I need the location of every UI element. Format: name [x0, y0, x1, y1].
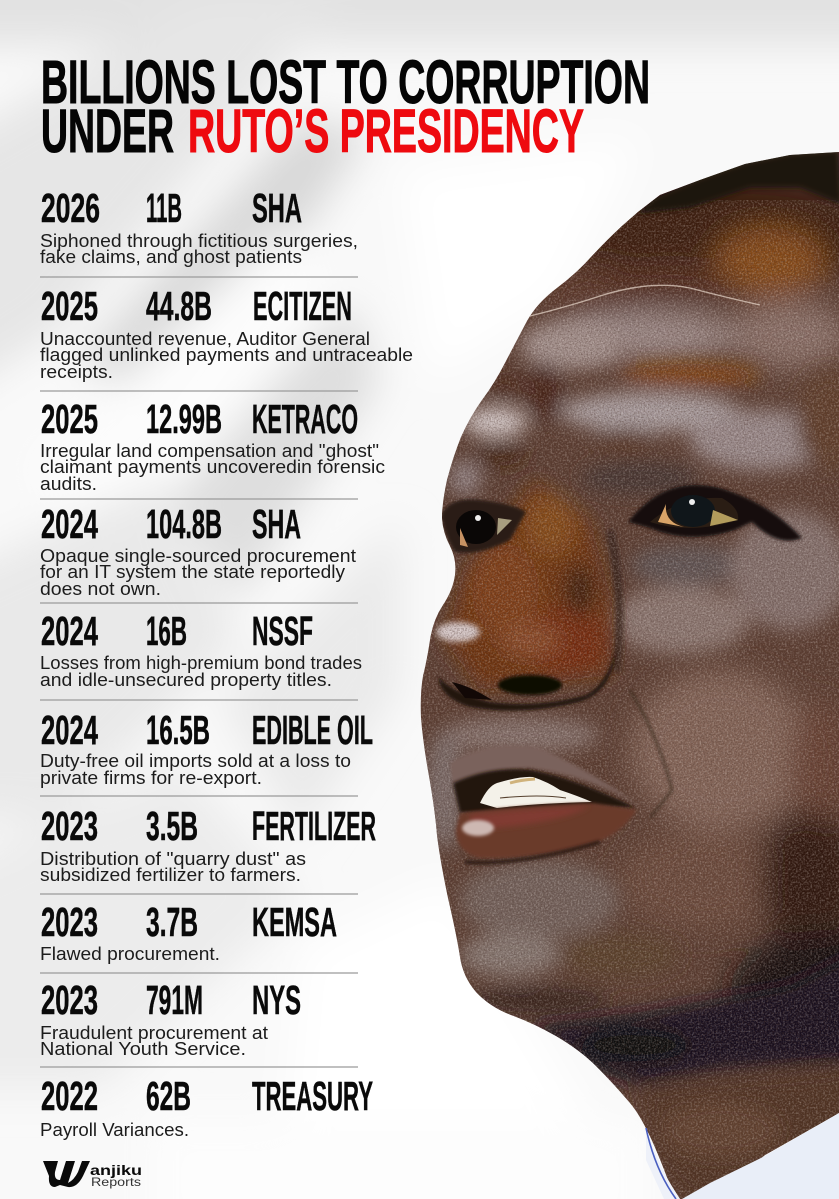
- row: 2023 NYS: NYS: [252, 977, 301, 1023]
- row: 2024 Edible Oil: 16.5B: [146, 707, 210, 753]
- row: 2025 eCitizen: [40, 283, 413, 382]
- upper lip: [450, 744, 632, 801]
- shirt collar: [646, 1113, 839, 1199]
- row: 2024 SHA: does not own.: [40, 578, 161, 599]
- row: 2023 Kemsa: Flawed procurement.: [40, 943, 220, 964]
- row: 2024 Edible Oil: private firms for re-export.: [40, 767, 262, 788]
- row: 2025 Ketraco: KETRACO: [252, 396, 358, 442]
- row: 2023 Kemsa: [40, 899, 337, 964]
- row: 2025 Ketraco: claimant payments uncoveredin forensic: [40, 456, 385, 477]
- forehead crease highlight: [530, 285, 760, 316]
- row: 2026 SHA: SHA: [252, 185, 302, 231]
- row: 2022 Treasury: 62B: [146, 1073, 191, 1119]
- row: 2023 NYS: Fraudulent procurement at: [40, 1022, 269, 1043]
- row: 2023 Kemsa: KEMSA: [252, 899, 337, 945]
- row: 2023 Fertilizer: 2023: [41, 803, 98, 849]
- portrait: close-up illustration of a face in profile: [410, 140, 839, 1199]
- row: 2024 NSSF: [40, 608, 362, 690]
- title line 2: RUTO’S PRESIDENCY: [188, 97, 584, 165]
- forehead: [545, 180, 839, 369]
- row: 2022 Treasury: Payroll Variances.: [40, 1119, 189, 1140]
- row: 2025 eCitizen: 2025: [41, 283, 98, 329]
- row: 2023 NYS: National Youth Service.: [40, 1038, 246, 1059]
- smile line: [630, 690, 672, 818]
- row: 2024 SHA: for an IT system the state reportedly: [40, 561, 346, 582]
- row: 2025 Ketraco: 2025: [41, 396, 98, 442]
- row: 2024 Edible Oil: [40, 707, 373, 788]
- row: 2023 Kemsa: 2023: [41, 899, 98, 945]
- title: [41, 48, 650, 165]
- row: 2024 SHA: 2024: [41, 501, 98, 547]
- logo: Wanjiku Reports: Reports: [91, 1177, 141, 1189]
- row: 2024 Edible Oil: Duty-free oil imports sold at a loss to: [40, 750, 351, 771]
- row: 2025 eCitizen: 44.8B: [146, 283, 212, 329]
- hair line: [636, 150, 839, 214]
- row: 2026 SHA: Siphoned through fictitious surgeries,: [40, 230, 358, 251]
- neck in shadow: [530, 950, 839, 1199]
- row: 2026 SHA: 11B: [146, 185, 182, 231]
- row: 2023 Fertilizer: FERTILIZER: [252, 803, 376, 849]
- icon: W mark: [43, 1161, 90, 1187]
- brow and temple highlights: [449, 321, 839, 654]
- row: 2023 NYS: 791M: [146, 977, 203, 1023]
- row: 2025 Ketraco: Irregular land compensation and "ghost": [40, 440, 379, 461]
- row: 2025 Ketraco: audits.: [40, 473, 97, 494]
- row: 2024 NSSF: NSSF: [252, 608, 313, 654]
- row: 2023 NYS: [40, 977, 301, 1059]
- row: 2025 eCitizen: Unaccounted revenue, Auditor General: [40, 328, 370, 349]
- row: 2023 Fertilizer: 3.5B: [146, 803, 198, 849]
- row: 2024 NSSF: and idle-unsecured property titles.: [40, 669, 332, 690]
- logo: Wanjiku Reports: [43, 1161, 142, 1189]
- row: 2024 NSSF: 16B: [146, 608, 187, 654]
- skin grain texture: [410, 200, 839, 1199]
- row: 2024 SHA: SHA: [252, 501, 301, 547]
- corruption list: [40, 185, 413, 1140]
- row: 2026 SHA: fake claims, and ghost patients: [40, 246, 302, 267]
- cheek: [620, 670, 839, 1050]
- row: 2022 Treasury: TREASURY: [252, 1073, 373, 1119]
- row: 2025 Ketraco: 12.99B: [146, 396, 222, 442]
- row: 2023 Fertilizer: [40, 803, 376, 885]
- mouth interior: [453, 769, 636, 813]
- row: 2026 SHA: [40, 185, 358, 267]
- lower face and chin: [424, 710, 626, 1022]
- row: 2022 Treasury: 2022: [41, 1073, 98, 1119]
- row: 2025 Ketraco: [40, 396, 385, 494]
- mouth: [450, 745, 640, 863]
- row: 2023 Fertilizer: Distribution of "quarry dust" as: [40, 848, 306, 869]
- row: 2022 Treasury: [40, 1073, 373, 1140]
- row: 2024 Edible Oil: EDIBLE OIL: [252, 707, 373, 753]
- nose: [445, 480, 612, 690]
- row: 2026 SHA: 2026: [41, 185, 100, 231]
- row: 2023 Fertilizer: subsidized fertilizer to farmers.: [40, 864, 301, 885]
- eye: far: [628, 485, 802, 541]
- title line 2: [41, 97, 584, 165]
- eye: near (profile): [441, 499, 526, 553]
- row: 2024 SHA: Opaque single-sourced procurement: [40, 545, 357, 566]
- nostril: [438, 650, 616, 711]
- title line 2: UNDER: [41, 97, 174, 165]
- row: 2024 SHA: [40, 501, 357, 599]
- row: 2025 eCitizen: flagged unlinked payments and untraceable: [40, 344, 413, 365]
- row: 2023 NYS: 2023: [41, 977, 98, 1023]
- row: 2023 Kemsa: 3.7B: [146, 899, 198, 945]
- row: 2024 Edible Oil: 2024: [41, 707, 98, 753]
- row: 2024 SHA: 104.8B: [146, 501, 222, 547]
- lower lip: [456, 803, 637, 858]
- row: 2024 NSSF: Losses from high-premium bond trades: [40, 652, 362, 673]
- logo: Wanjiku Reports: anjiku: [90, 1162, 142, 1178]
- row: 2025 eCitizen: ECITIZEN: [253, 283, 352, 329]
- teeth: [480, 777, 592, 808]
- row: 2024 NSSF: 2024: [41, 608, 98, 654]
- row: 2025 eCitizen: receipts.: [40, 361, 113, 382]
